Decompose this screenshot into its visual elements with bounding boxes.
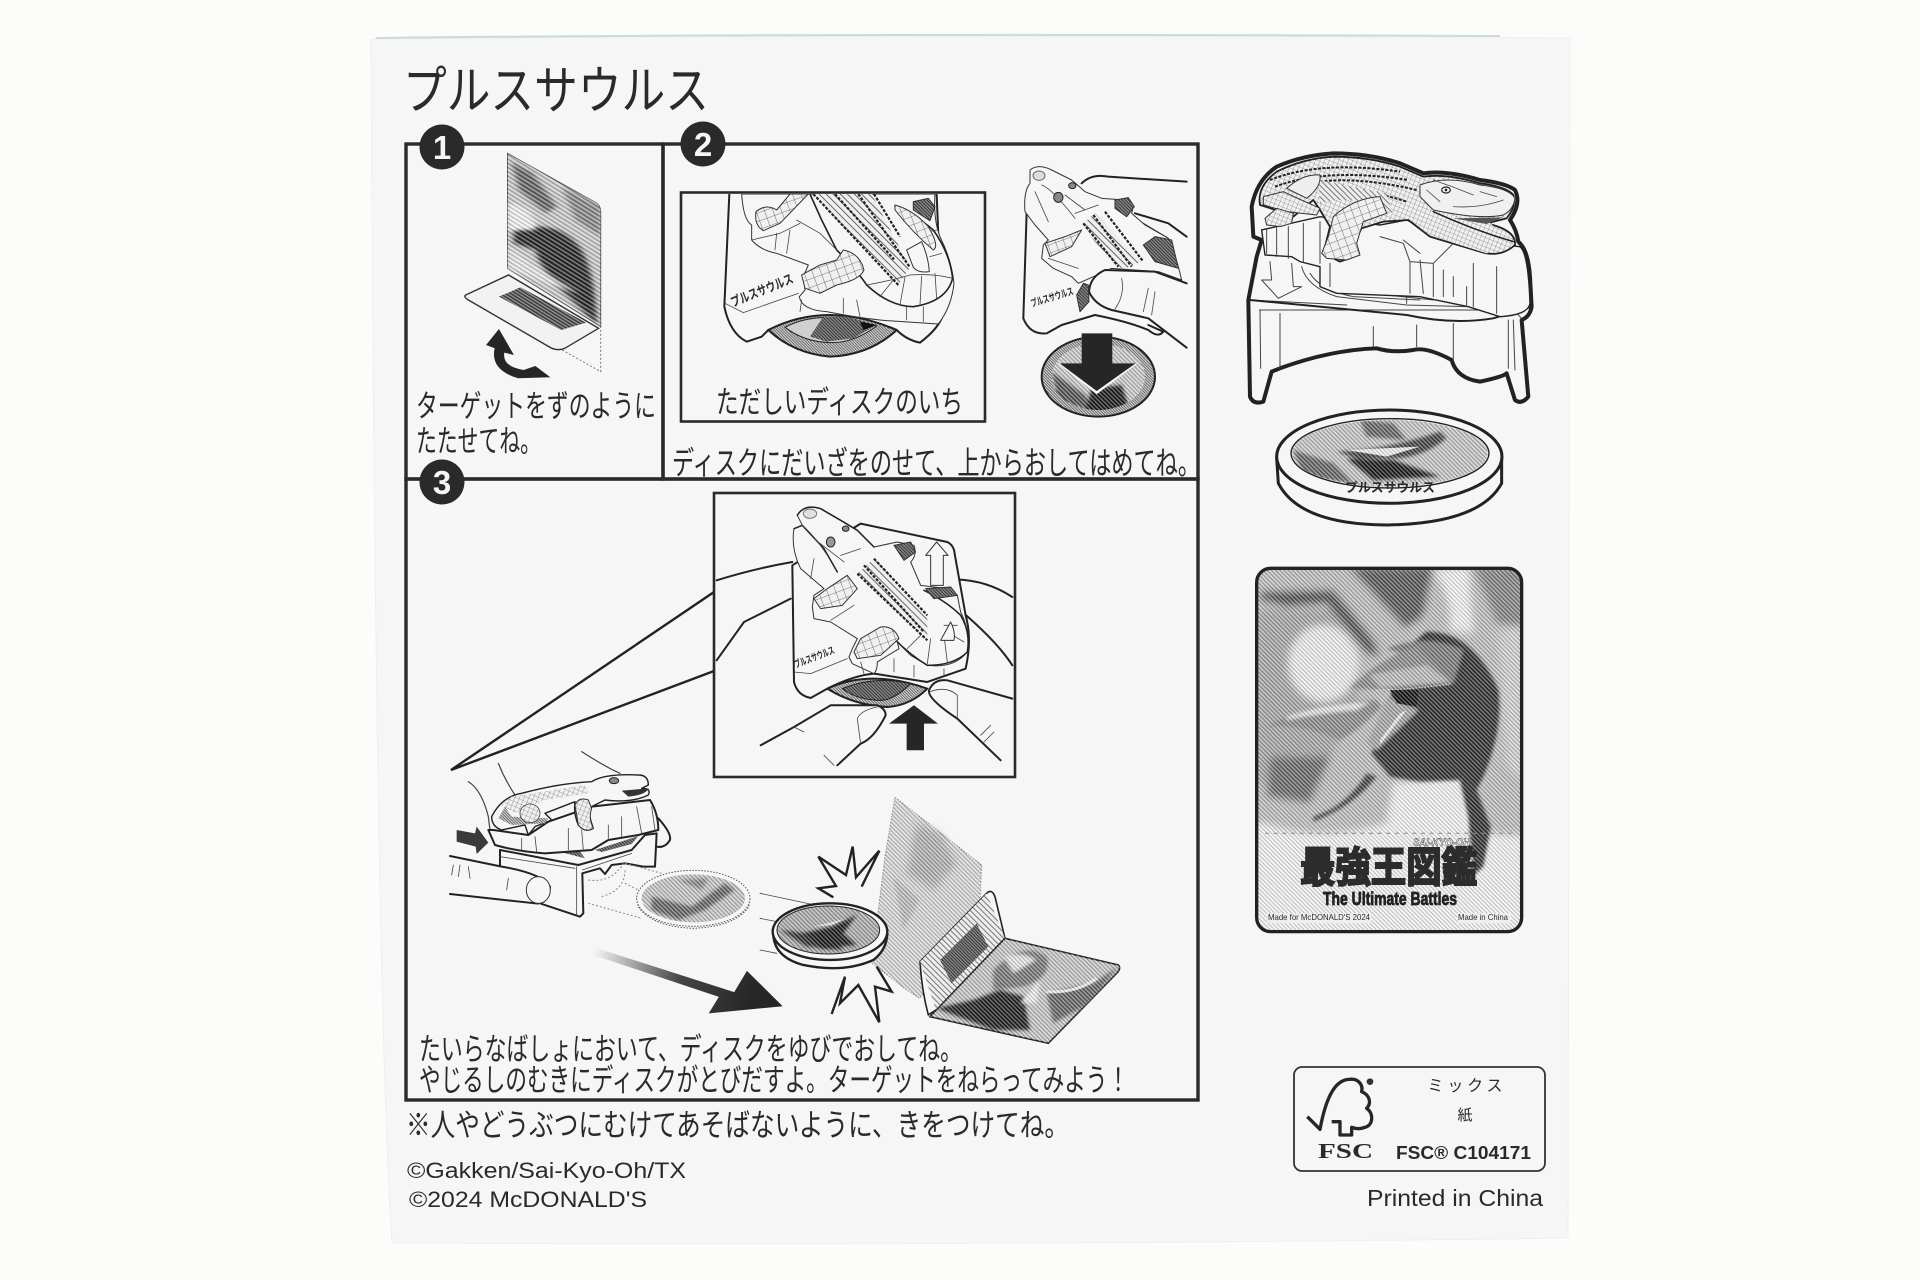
step 1 text (416, 389, 656, 459)
pressing stand onto disc illustration (1023, 167, 1187, 417)
licence code: FSC® C104171 (1396, 1143, 1531, 1163)
small card name label: プルスサウルス (1029, 286, 1075, 310)
copyright (407, 1158, 686, 1212)
step number badge 1: 1 (433, 129, 451, 166)
card logo: The Ultimate Battles (1323, 889, 1457, 909)
target ghost, flying disc, bursts and folded target (760, 797, 1123, 1047)
copyright: ©2024 McDONALD'S (409, 1187, 647, 1212)
product: target card (1250, 563, 1528, 937)
step number badge 2 (680, 122, 726, 166)
zoom inset frame (714, 493, 1015, 777)
paper sheet (371, 35, 1570, 1244)
step 1 text: ターゲットをずのように (416, 389, 656, 424)
alligator body (1260, 157, 1515, 262)
step 3 text: やじるしのむきにディスクがとびだすよ。ターゲットをねらってみよう！ (419, 1063, 1129, 1098)
card small print: Made for McDONALD'S 2024 (1268, 912, 1370, 922)
small push arrow (457, 827, 488, 854)
stand details (1250, 262, 1532, 370)
launcher with alligator (450, 752, 670, 917)
copyright: ©Gakken/Sai-Kyo-Oh/TX (407, 1158, 686, 1183)
panel: step 3 (406, 479, 1198, 1100)
step number badge 2: 2 (694, 126, 712, 163)
icon: FSC tree check (1307, 1078, 1373, 1135)
card name label: プルスサウルス (729, 271, 795, 310)
printed in china: Printed in China (1367, 1185, 1543, 1211)
small card name label: プルスサウルス (793, 645, 836, 671)
card logo: SAI-KYO-OH (1413, 837, 1471, 849)
card artwork (1250, 563, 1528, 937)
FSC label (1294, 1067, 1545, 1171)
panel: step 1 (406, 144, 663, 479)
zoom inset (714, 493, 1015, 777)
step number badge 3 (420, 460, 464, 504)
card small print: Made in China (1458, 912, 1508, 922)
mix label: ミックス (1428, 1077, 1502, 1095)
inset illustration (724, 194, 954, 357)
panel 1 frame (406, 144, 663, 479)
paper label: 紙 (1457, 1107, 1473, 1124)
panel: step 2 (663, 144, 1200, 481)
correct disc position inset (681, 192, 985, 422)
disc trajectory and faded disc (588, 863, 750, 928)
card small print (1268, 912, 1508, 922)
step number badge 1 (420, 124, 464, 170)
inset caption: ただしいディスクのいち (716, 385, 963, 420)
step 3 text: たいらなばしょにおいて、ディスクをゆびでおしてね。 (419, 1032, 962, 1067)
inset frame (681, 192, 985, 422)
step 1 text: たたせてね。 (416, 424, 541, 459)
card logo: 最強王図鑑 (1300, 844, 1477, 891)
step 3 text (419, 1032, 1129, 1098)
zoom callout wedge (451, 592, 714, 770)
title: プルスサウルス (403, 63, 709, 121)
zoom inset illustration (717, 507, 1012, 765)
card logo (1300, 837, 1477, 909)
step 1 illustration (465, 150, 605, 378)
safety note: ※人やどうぶつにむけてあそばないように、きをつけてね。 (406, 1108, 1069, 1143)
step 2 text: ディスクにだいざをのせて、上からおしてはめてね。 (672, 445, 1200, 481)
panel 3 frame (406, 479, 1198, 1100)
motion arrow (591, 947, 783, 1013)
product: alligator on stand (1248, 153, 1532, 403)
disc name label: プルスサウルス (1345, 480, 1435, 495)
FSC wordmark: FSC (1318, 1139, 1373, 1163)
step number badge 3: 3 (433, 464, 451, 501)
product: disc (1277, 410, 1502, 525)
panel 2 frame (663, 144, 1198, 479)
rock base (1262, 217, 1530, 317)
FSC frame (1294, 1067, 1545, 1171)
